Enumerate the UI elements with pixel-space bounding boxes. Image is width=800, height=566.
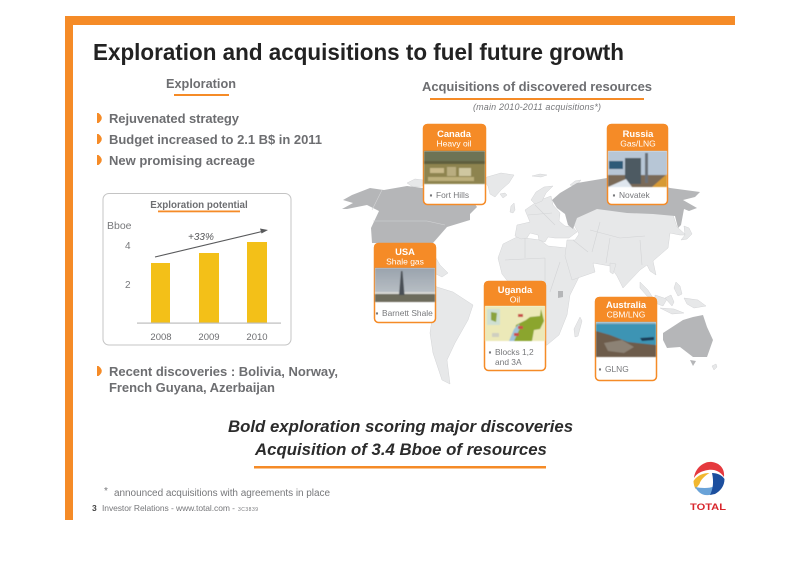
card: Russia (607, 124, 668, 204)
frame: orange top and left bars (65, 16, 735, 520)
logo: Total: TOTAL (690, 502, 727, 512)
footer: page number and source: 3 (92, 503, 97, 513)
axis labels: 4 (125, 241, 131, 252)
growth arrow: +33% (188, 232, 214, 243)
card: Australia: GLNG (605, 364, 629, 374)
heading: acquisitions (422, 79, 652, 112)
acquisition regions in dark grey (342, 178, 713, 366)
card: Canada: ▪ (430, 190, 432, 200)
card: Uganda: Oil (510, 294, 520, 304)
footer: page number and source: 3C3839 (238, 507, 258, 513)
card: USA: Barnett Shale (382, 308, 433, 318)
card: Canada (423, 124, 486, 204)
photo: GLNG coastline (596, 322, 656, 357)
card: USA (374, 243, 436, 322)
year labels: 2009 (198, 332, 220, 343)
bullet: recent discoveries: Recent discoveries : Bolivia, Norway, (109, 364, 338, 379)
card: Canada: Fort Hills (436, 190, 469, 200)
card: Australia (595, 297, 657, 380)
conclusion text (228, 417, 573, 468)
card: Canada: Canada (437, 128, 472, 139)
world map (342, 173, 717, 384)
bars (151, 242, 267, 323)
card: Uganda: and 3A (495, 357, 522, 367)
axis labels: Bboe (107, 220, 132, 232)
axis labels (107, 220, 132, 291)
card: Uganda: Uganda (498, 284, 533, 295)
bullet list: exploration highlights: Budget increased to 2.1 B$ in 2011 (109, 132, 322, 147)
card: Australia: CBM/LNG (607, 310, 645, 320)
footer: page number and source: Investor Relations - www.total.com - (102, 503, 235, 513)
title: Exploration and acquisitions to fuel future growth (93, 39, 624, 65)
photo: drilling rig (375, 268, 435, 302)
card: Canada: Heavy oil (437, 138, 472, 148)
card: Russia: Novatek (619, 190, 651, 200)
footnote: * (104, 486, 108, 497)
photo: LNG plant (608, 151, 667, 187)
card: Uganda: Blocks 1,2 (495, 347, 534, 357)
footnote: announced acquisitions with agreements in place (114, 488, 330, 499)
conclusion text: Acquisition of 3.4 Bboe of resources (254, 440, 547, 459)
bullet list: exploration highlights: New promising acreage (109, 153, 255, 168)
year labels (150, 332, 268, 343)
chart title: Exploration potential (150, 200, 248, 211)
card: Uganda: ▪ (488, 347, 492, 357)
bullet list: exploration highlights: Rejuvenated strategy (109, 111, 240, 126)
growth arrow (155, 228, 268, 257)
card: Russia: ▪ (612, 190, 616, 200)
panel: exploration potential bar chart (103, 194, 291, 345)
year labels: 2008 (150, 332, 172, 343)
bullet list: exploration highlights (97, 111, 322, 168)
conclusion text: Bold exploration scoring major discoveries (228, 417, 573, 436)
card: USA: ▪ (376, 308, 378, 318)
photo: oil sands site (424, 151, 485, 184)
light land masses (407, 173, 717, 384)
logo: Total (690, 462, 727, 512)
card: USA: Shale gas (386, 256, 424, 266)
heading: acquisitions: Acquisitions of discovered resources (422, 79, 652, 94)
bullet: recent discoveries: French Guyana, Azerbaijan (109, 380, 275, 395)
bullet: recent discoveries (97, 364, 338, 395)
card: USA: USA (395, 246, 415, 257)
card: Russia: Russia (623, 128, 654, 139)
year labels: 2010 (246, 332, 268, 343)
card: Russia: Gas/LNG (620, 138, 656, 148)
card: Australia: ▪ (598, 364, 602, 374)
map image: Uganda blocks (485, 306, 545, 341)
axis labels: 2 (125, 280, 131, 291)
card: Uganda (484, 281, 546, 370)
heading: acquisitions: (main 2010-2011 acquisitions*) (473, 102, 601, 112)
card: Australia: Australia (606, 299, 647, 310)
heading: exploration: Exploration (166, 77, 236, 91)
